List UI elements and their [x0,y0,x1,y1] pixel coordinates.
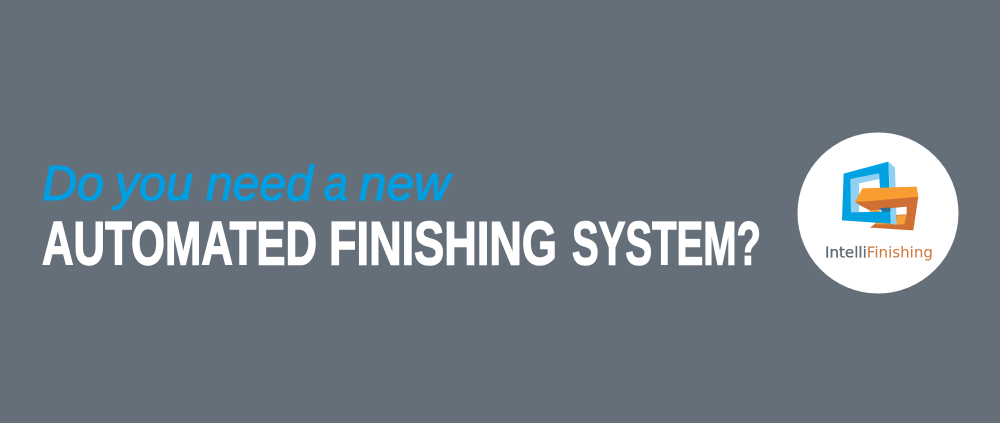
heading: Do you need a new: Do [42,157,104,211]
white circle [798,132,958,294]
orange frame top [855,197,918,210]
logo badge: IntelliFinishing [798,132,958,294]
heading: Do you need a new: a [324,157,348,211]
heading: AUTOMATED FINISHING SYSTEM?: SYSTEM? [572,210,761,278]
logo wordmark: IntelliFinishing [825,244,933,262]
heading: AUTOMATED FINISHING SYSTEM?: FINISHING [329,210,557,278]
heading: AUTOMATED FINISHING SYSTEM?: AUTOMATED [42,210,317,278]
blue frame inner sides [850,173,879,212]
heading: Do you need a new: new [359,157,454,211]
blue frame front [842,162,891,224]
orange frame lower part [868,197,918,230]
heading: AUTOMATED FINISHING SYSTEM? [42,210,761,278]
heading: Do you need a new [42,157,454,211]
heading: Do you need a new: need [206,157,315,211]
heading: Do you need a new: you [112,157,193,211]
icon: interlocking frames [842,162,918,230]
blue frame right side [888,162,897,225]
